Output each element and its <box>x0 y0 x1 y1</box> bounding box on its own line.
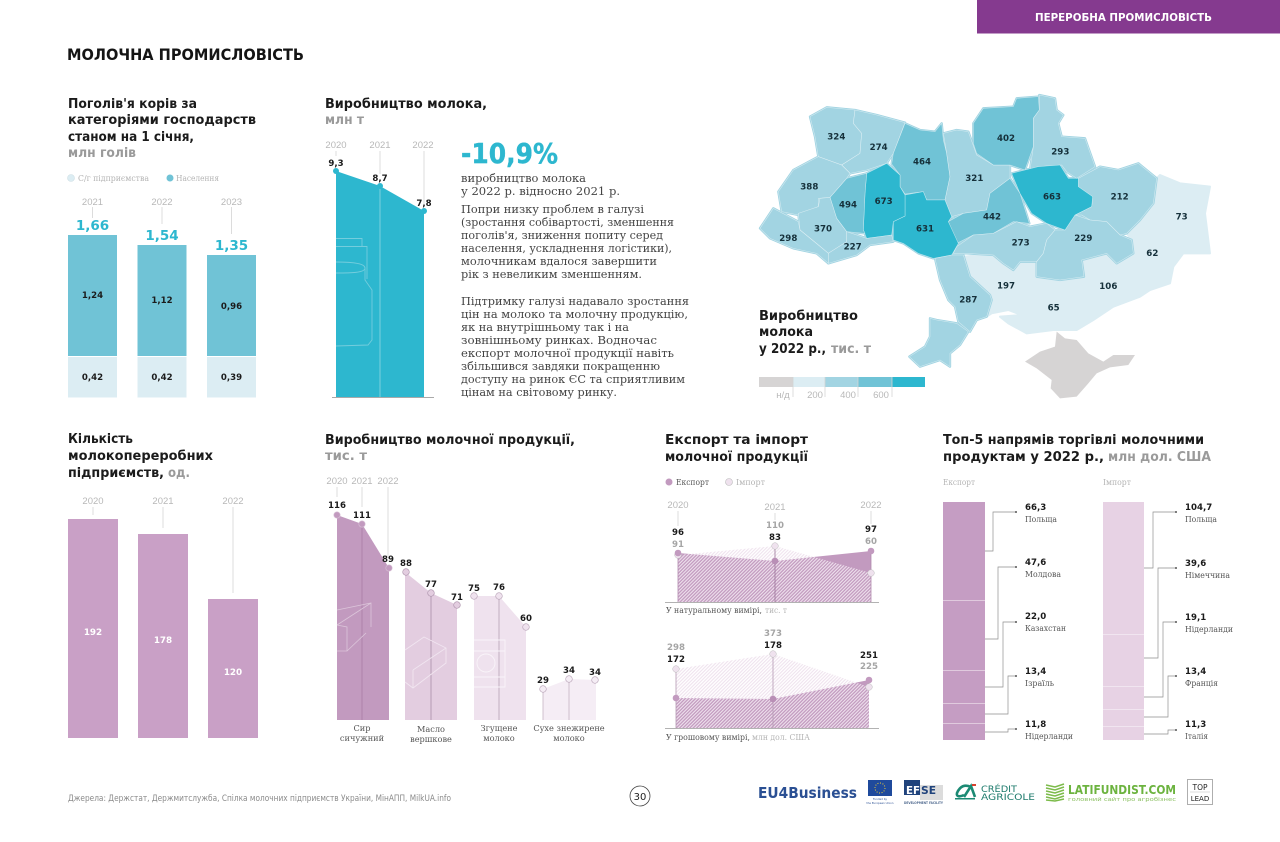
stacked column: import: Імпорт <box>1103 477 1131 487</box>
area chart: milk production: 2022 <box>412 140 434 151</box>
bar chart: enterprises <box>68 496 258 738</box>
heading: cow population: категоріями господарств <box>68 112 256 128</box>
footer: sources: Джерела: Держстат, Держмитслужба, Спілка молочних підприємств України, МінАПП, MilkUA.info <box>68 794 451 804</box>
chart: value: 172 <box>667 655 685 665</box>
heading: cow population: станом на 1 січня, <box>68 129 194 145</box>
map: milk production by region: 298 <box>779 234 797 244</box>
map heading: молока <box>759 324 813 340</box>
text block: commentary: молочникам вдалося завершити <box>461 254 657 268</box>
text block: commentary: Підтримку галузі надавало зростання <box>461 294 689 308</box>
chart: cheese: 89 <box>382 555 394 565</box>
map heading <box>759 308 871 357</box>
heading: cow population: Поголів'я корів за <box>68 96 197 112</box>
heading: dairy products <box>325 432 575 464</box>
chart: cheese: 116 <box>328 501 346 511</box>
panel: milk production <box>325 96 487 398</box>
heading: export and import: Експорт та імпорт <box>665 432 808 448</box>
stacked column: export: 22,0 <box>1025 612 1046 622</box>
logo: Credit Agricole: CRÉDIT <box>981 783 1018 795</box>
bar 2023: 0,96 <box>221 302 242 312</box>
area chart: milk production: 8,7 <box>372 174 388 184</box>
bar 2023: 0,39 <box>221 373 242 383</box>
map: milk production by region: 494 <box>839 200 857 210</box>
logo: Top Lead: LEAD <box>1191 795 1209 803</box>
logo: EFSE: SE <box>921 784 936 797</box>
map: milk production by region: 229 <box>1074 234 1092 244</box>
stacked column: export: 47,6 <box>1025 558 1046 568</box>
logo: EFSE: EF <box>906 784 920 797</box>
logo: Top Lead <box>1188 780 1212 804</box>
map: milk production by region: 293 <box>1051 147 1069 157</box>
chart: cheese: сичужний <box>340 733 385 743</box>
chart: value <box>665 629 879 742</box>
logo: Latifundist: головний сайт про агробізнес <box>1068 796 1176 803</box>
logo: Credit Agricole: AGRICOLE <box>981 793 1035 803</box>
bar 2021: 1,24 <box>82 291 103 301</box>
map: milk production by region: 370 <box>814 225 832 235</box>
stacked column: export: Ізраїль <box>1025 678 1055 688</box>
stacked column: export: Молдова <box>1025 569 1061 579</box>
page number <box>630 786 650 806</box>
logo: EFSE <box>904 780 943 805</box>
stacked column: import <box>1103 477 1233 741</box>
heading: top-5: Топ-5 напрямів торгівлі молочними <box>943 432 1204 448</box>
chart: skimmed milk powder: 34 <box>563 666 575 676</box>
chart: volume: 110 <box>766 521 784 531</box>
callout: -10,9%: виробництво молока <box>461 171 586 185</box>
map: milk production by region: 62 <box>1146 249 1158 259</box>
chart: butter: Масло <box>417 724 445 734</box>
bar chart: enterprises: 2022 <box>222 496 244 507</box>
page title: МОЛОЧНА ПРОМИСЛОВІСТЬ <box>67 45 304 64</box>
panel: cow population <box>68 96 256 398</box>
chart: cheese <box>328 501 394 743</box>
logo: Credit Agricole <box>955 783 1035 803</box>
stacked column: import: Польща <box>1185 514 1217 524</box>
panel: export and import <box>665 432 882 742</box>
map heading: у 2022 р., <box>759 341 826 357</box>
heading: export and import <box>665 432 808 465</box>
panel: processing enterprises <box>68 431 258 738</box>
chart: condensed milk: Згущене <box>481 723 518 733</box>
section banner: ПЕРЕРОБНА ПРОМИСЛОВІСТЬ <box>1035 11 1212 24</box>
logo: Top Lead: TOP <box>1191 783 1208 792</box>
map: milk production by region: 324 <box>827 132 845 142</box>
chart: butter <box>400 559 463 744</box>
bar chart: enterprises: 2020 <box>82 496 104 507</box>
stacked column: import: 11,3 <box>1185 720 1206 730</box>
years: 2022 <box>377 476 399 487</box>
area chart: milk production: 9,3 <box>328 159 344 169</box>
map legend: 600 <box>873 390 889 401</box>
bar 2021: 0,42 <box>82 373 103 383</box>
map legend: 400 <box>840 390 856 401</box>
heading: top-5 <box>943 432 1211 465</box>
map legend <box>759 377 925 401</box>
chart: value: 373 <box>764 629 782 639</box>
logo: EU flag: the European Union <box>866 801 894 805</box>
heading: cow population <box>68 96 256 161</box>
heading: processing enterprises <box>68 431 213 481</box>
text block: commentary: експорт молочної продукції навіть <box>461 346 674 360</box>
text block: commentary: Попри низку проблем в галузі <box>461 202 644 216</box>
callout: -10,9% <box>461 137 620 198</box>
text block: commentary: зовнішньому ринках. Водночас <box>461 333 657 347</box>
text block: commentary: цінам на світовому ринку. <box>461 385 617 399</box>
map: milk production by region: 197 <box>997 282 1015 292</box>
heading: milk production: млн т <box>325 112 364 128</box>
section banner <box>977 0 1280 34</box>
map: milk production by region: 65 <box>1048 304 1060 314</box>
logo: EU flag: Funded by <box>873 797 887 801</box>
stacked column: import: 13,4 <box>1185 667 1206 677</box>
bar 2022: 0,42 <box>151 373 173 383</box>
years <box>326 476 399 556</box>
heading: processing enterprises: од. <box>168 465 190 481</box>
map: milk production by region: 402 <box>997 134 1015 144</box>
legend: export and import: Імпорт <box>736 477 765 487</box>
chart: volume: У натуральному вимірі, <box>666 605 762 615</box>
bar 2022: 2022 <box>151 197 173 208</box>
stacked column: import: 39,6 <box>1185 559 1206 569</box>
years: 2021 <box>351 476 373 487</box>
heading: processing enterprises: молокопереробних <box>68 448 213 464</box>
bar 2023 <box>207 197 256 398</box>
bar 2022: 1,54 <box>145 228 179 244</box>
logo: EU flag <box>866 780 894 805</box>
text block: commentary: цін на молоко та молочну продукцію, <box>461 307 688 321</box>
text block: commentary <box>461 202 689 399</box>
chart: skimmed milk powder <box>533 666 605 743</box>
map heading: тис. т <box>831 341 871 357</box>
chart: condensed milk <box>468 583 532 743</box>
chart: condensed milk: молоко <box>483 733 515 743</box>
chart: volume: 2021 <box>764 502 786 513</box>
bar chart: enterprises: 192 <box>84 628 102 638</box>
chart: butter: 71 <box>451 593 463 603</box>
bar 2023: 2023 <box>221 197 242 208</box>
stacked column: import: Німеччина <box>1185 570 1230 580</box>
bar 2021: 2021 <box>82 197 103 208</box>
chart: value: млн дол. США <box>752 732 811 742</box>
map legend: н/д <box>776 390 790 401</box>
logo: Latifundist <box>1046 782 1176 803</box>
map: milk production by region: 106 <box>1099 282 1117 292</box>
bar 2021: 1,66 <box>76 218 109 234</box>
chart: value: 251 <box>860 651 878 661</box>
chart: cheese: Сир <box>354 723 370 733</box>
stacked column: export: Нідерланди <box>1025 731 1073 741</box>
text block: commentary: (зростання собівартості, зменшення <box>461 215 674 229</box>
map: milk production by region: 388 <box>800 183 818 193</box>
chart: value: У грошовому вимірі, <box>666 732 750 742</box>
bar 2022: 1,12 <box>151 296 173 306</box>
stacked column: import: 104,7 <box>1185 503 1212 513</box>
area chart: milk production: 2021 <box>369 140 391 151</box>
chart: butter: вершкове <box>410 734 452 744</box>
map: milk production by region: 464 <box>913 158 931 168</box>
logo: EFSE: DEVELOPMENT FACILITY <box>904 801 943 805</box>
logo: EU4Business: EU4Business <box>758 784 857 802</box>
legend: cow population: Населення <box>176 173 219 183</box>
chart: skimmed milk powder: 34 <box>589 668 601 678</box>
stacked column: import: 19,1 <box>1185 613 1206 623</box>
heading: export and import: молочної продукції <box>665 449 808 465</box>
bar 2023: 1,35 <box>215 238 248 254</box>
panel: dairy products <box>325 432 605 744</box>
map: milk production by region <box>760 95 1210 398</box>
map heading: Виробництво <box>759 308 858 324</box>
logo: Latifundist: LATIFUNDIST.COM <box>1068 782 1176 797</box>
stacked column: export: 66,3 <box>1025 503 1046 513</box>
area chart: milk production: 7,8 <box>416 199 432 209</box>
chart: volume <box>665 500 882 615</box>
heading: dairy products: тис. т <box>325 448 367 464</box>
bar chart: enterprises: 178 <box>154 636 172 646</box>
text block: commentary: збільшився завдяки покращенню <box>461 359 660 373</box>
text block: commentary: рік з невеликим зменшенням. <box>461 267 642 281</box>
area chart: milk production: 2020 <box>325 140 347 151</box>
chart: skimmed milk powder: Сухе знежирене <box>533 723 605 733</box>
chart: cheese: 111 <box>353 511 371 521</box>
chart: butter: 88 <box>400 559 412 569</box>
stacked column: export <box>943 477 1073 741</box>
legend: cow population <box>68 173 219 183</box>
bar 2021 <box>68 197 117 398</box>
map: milk production by region: 287 <box>959 295 977 305</box>
heading: milk production: Виробництво молока, <box>325 96 487 112</box>
map: milk production by region: 273 <box>1012 239 1030 249</box>
chart: value: 178 <box>764 641 782 651</box>
stacked column: import: Італія <box>1185 731 1208 741</box>
heading: top-5: млн дол. США <box>1108 449 1211 465</box>
chart: condensed milk: 75 <box>468 584 480 594</box>
chart: value: 298 <box>667 643 685 653</box>
heading: top-5: продуктам у 2022 р., <box>943 449 1104 465</box>
stacked column: export: 11,8 <box>1025 720 1046 730</box>
legend: export and import <box>666 477 765 487</box>
chart: value: 225 <box>860 662 878 672</box>
heading: milk production <box>325 96 487 128</box>
text block: commentary: населення, ускладнення логістики), <box>461 241 672 255</box>
panel: top-5 trade destinations <box>943 432 1233 741</box>
callout: -10,9%: у 2022 р. відносно 2021 р. <box>461 184 620 198</box>
map: milk production by region: 212 <box>1111 192 1129 202</box>
stacked column: import: Нідерланди <box>1185 624 1233 634</box>
heading: processing enterprises: підприємств, <box>68 465 164 481</box>
map: milk production by region: 227 <box>844 243 862 253</box>
chart: volume: 83 <box>769 533 781 543</box>
text block: commentary: поголів'я, зниження попиту серед <box>461 228 663 242</box>
map: milk production by region: 673 <box>875 197 893 207</box>
callout: -10,9%: -10,9% <box>461 137 558 170</box>
chart: butter: 77 <box>425 580 437 590</box>
stacked column: import: Франція <box>1185 678 1218 688</box>
map legend: 200 <box>807 390 823 401</box>
heading: dairy products: Виробництво молочної продукції, <box>325 432 575 448</box>
legend: cow population: С/г підприємства <box>78 173 149 183</box>
stacked column: export: Казахстан <box>1025 623 1066 633</box>
chart: volume: 97 <box>865 525 877 535</box>
chart: volume: 2020 <box>667 500 689 511</box>
map: milk production by region: 663 <box>1043 192 1061 202</box>
area chart: milk production <box>325 140 434 398</box>
chart: volume: 91 <box>672 540 684 550</box>
heading: cow population: млн голів <box>68 145 136 161</box>
chart: volume: тис. т <box>765 605 787 615</box>
map: milk production by region: 73 <box>1176 213 1188 223</box>
bar chart: enterprises: 2021 <box>152 496 174 507</box>
page number: 30 <box>634 792 646 803</box>
chart: volume: 96 <box>672 528 684 538</box>
bar chart: enterprises: 120 <box>224 668 242 678</box>
text block: commentary: доступу на ринок ЄС та сприятливим <box>461 372 685 386</box>
chart: volume: 2022 <box>860 500 882 511</box>
legend: export and import: Експорт <box>676 477 709 487</box>
map: milk production by region: 442 <box>983 213 1001 223</box>
bar 2022 <box>138 197 186 398</box>
map: milk production by region: 631 <box>916 224 934 234</box>
chart: condensed milk: 60 <box>520 614 532 624</box>
heading: processing enterprises: Кількість <box>68 431 133 447</box>
map: milk production by region: 274 <box>870 143 888 153</box>
icon: milk bottle <box>336 238 372 346</box>
stacked column: export: Експорт <box>943 477 975 487</box>
chart: skimmed milk powder: молоко <box>553 733 585 743</box>
years: 2020 <box>326 476 348 487</box>
stacked column: export: 13,4 <box>1025 667 1046 677</box>
stacked column: export: Польща <box>1025 514 1057 524</box>
chart: condensed milk: 76 <box>493 583 505 593</box>
map: milk production by region: 321 <box>965 174 983 184</box>
chart: volume: 60 <box>865 537 877 547</box>
chart: skimmed milk powder: 29 <box>537 676 549 686</box>
text block: commentary: як на внутрішньому так і на <box>461 320 629 334</box>
